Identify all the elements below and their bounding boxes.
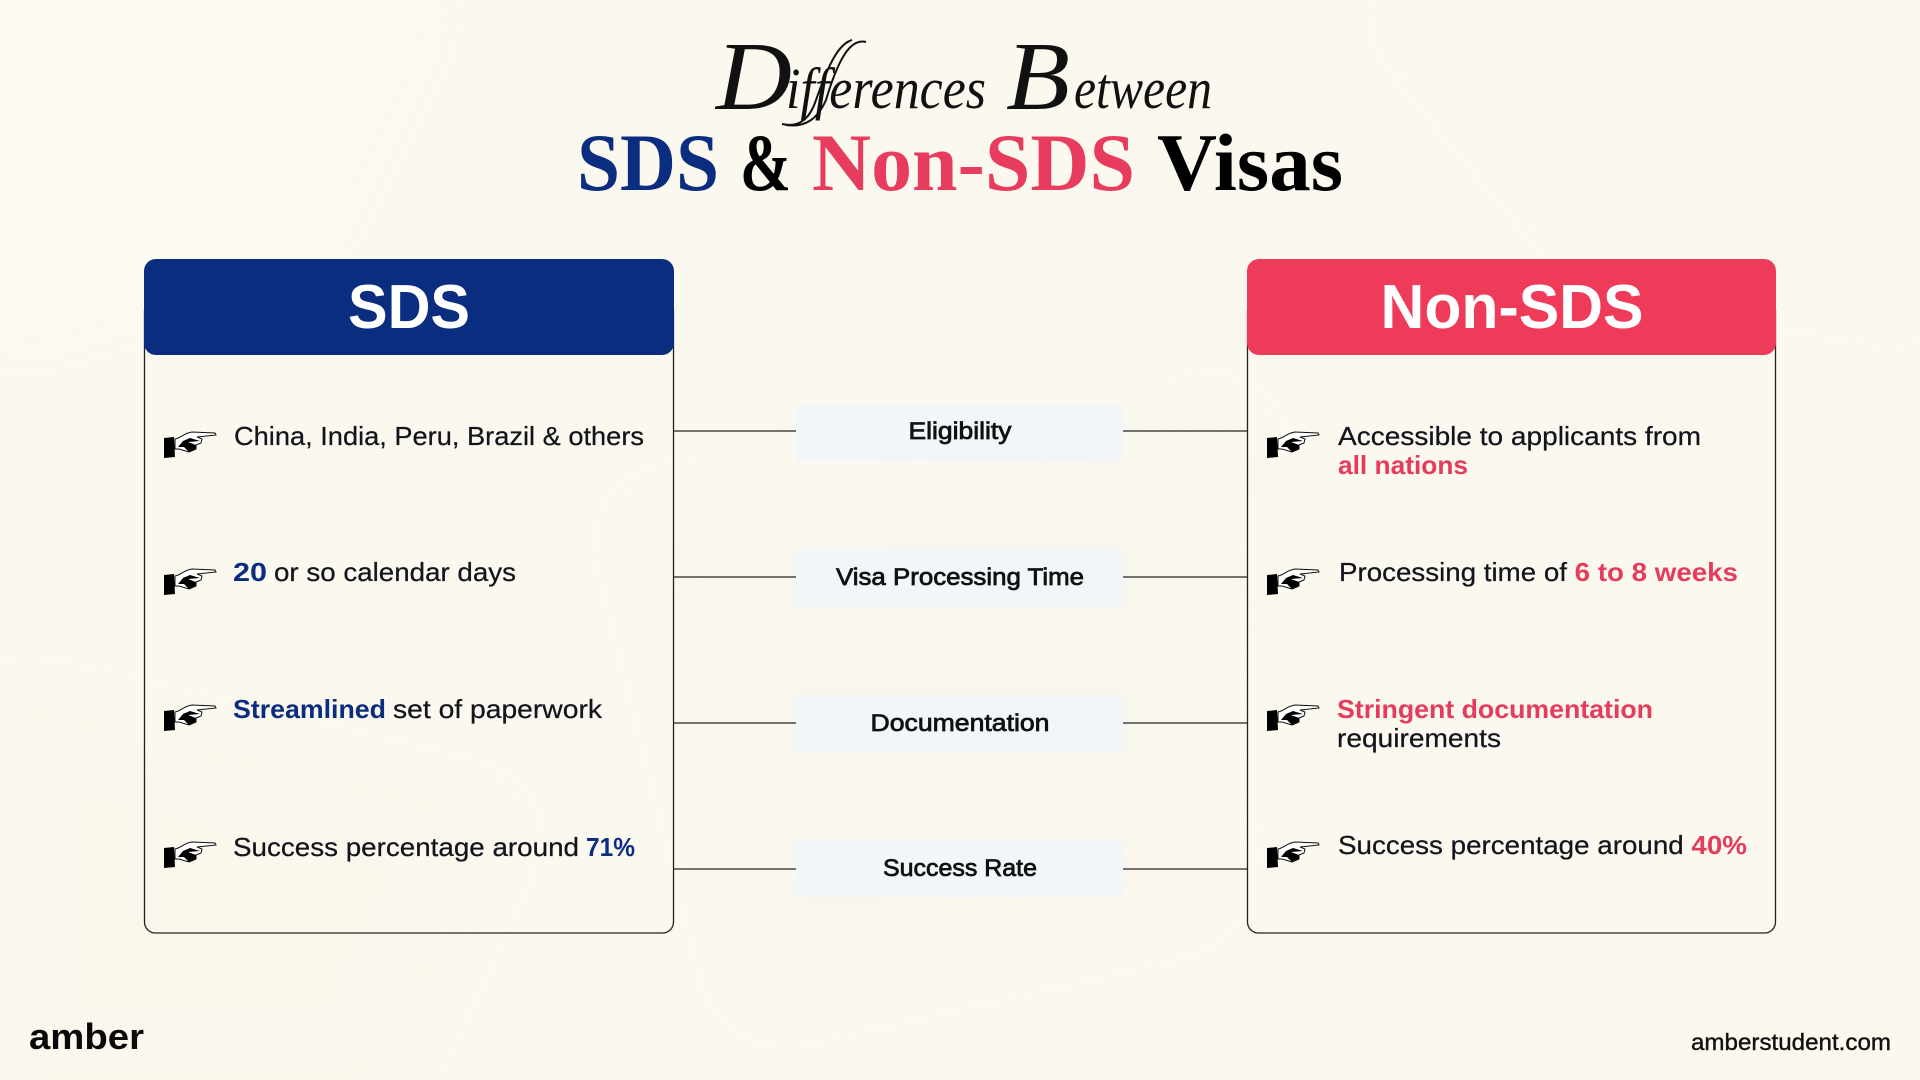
icon: pointing hand xyxy=(164,842,216,868)
Non-SDS: eligibility: Accessible to applicants from xyxy=(1338,421,1701,451)
title: SDS & Non-SDS Visas: & xyxy=(740,117,791,208)
SDS: eligibility: China, India, Peru, Brazil & others xyxy=(234,421,644,451)
Non-SDS: documentation: requirements xyxy=(1337,723,1501,753)
SDS: processing time: 20 xyxy=(233,557,267,587)
Non-SDS: eligibility xyxy=(1338,421,1701,480)
title: Differences Between: etween xyxy=(1074,56,1212,121)
Non-SDS: documentation: Stringent documentation xyxy=(1337,694,1653,724)
Non-SDS heading: Non-SDS xyxy=(1380,273,1644,342)
title: SDS & Non-SDS Visas xyxy=(577,117,1343,208)
icon: pointing hand xyxy=(1267,705,1319,731)
website url: amberstudent.com xyxy=(1691,1029,1891,1055)
label: Visa Processing Time: Visa Processing Time xyxy=(836,564,1084,591)
Non-SDS: eligibility: all nations xyxy=(1338,450,1468,480)
SDS header xyxy=(144,259,674,355)
panel: Non-SDS xyxy=(1247,259,1776,933)
title: SDS & Non-SDS Visas: SDS xyxy=(577,117,719,208)
title: Differences Between: D xyxy=(714,23,792,131)
SDS: documentation: Streamlined xyxy=(233,694,386,724)
label: Success Rate: Success Rate xyxy=(883,855,1037,882)
label: Eligibility xyxy=(796,404,1123,461)
Non-SDS: documentation xyxy=(1337,694,1653,753)
Non-SDS: success rate: Success percentage around 40% xyxy=(1338,830,1747,860)
title: Differences Between: ifferences xyxy=(786,56,986,121)
label: Visa Processing Time xyxy=(796,550,1123,607)
SDS heading: SDS xyxy=(348,273,470,342)
panel: SDS xyxy=(144,259,674,933)
label: Success Rate xyxy=(796,840,1123,897)
icon: pointing hand xyxy=(164,432,216,458)
title: Differences Between xyxy=(714,23,1212,131)
title: SDS & Non-SDS Visas: Non-SDS xyxy=(812,117,1135,208)
icon: pointing hand xyxy=(1267,432,1319,458)
connector lines xyxy=(674,431,1247,869)
SDS: documentation xyxy=(233,694,603,724)
title: Differences Between: B xyxy=(1006,23,1070,131)
icon: pointing hand xyxy=(1267,842,1319,868)
SDS: documentation: set of paperwork xyxy=(393,694,603,724)
label: Documentation: Documentation xyxy=(870,710,1050,737)
icon: pointing hand xyxy=(1267,569,1319,595)
SDS: success rate: 71% xyxy=(586,832,635,862)
label: Eligibility: Eligibility xyxy=(908,418,1012,445)
logo: amber: amber xyxy=(29,1016,144,1057)
label: Documentation xyxy=(796,695,1123,752)
SDS: success rate: Success percentage around xyxy=(233,832,579,862)
Non-SDS: processing time: Processing time of 6 to 8 weeks xyxy=(1339,557,1738,587)
SDS: processing time: or so calendar days xyxy=(274,557,516,587)
title: SDS & Non-SDS Visas: Visas xyxy=(1157,117,1343,208)
Non-SDS header xyxy=(1247,259,1776,355)
icon: pointing hand xyxy=(164,705,216,731)
icon: pointing hand xyxy=(164,569,216,595)
